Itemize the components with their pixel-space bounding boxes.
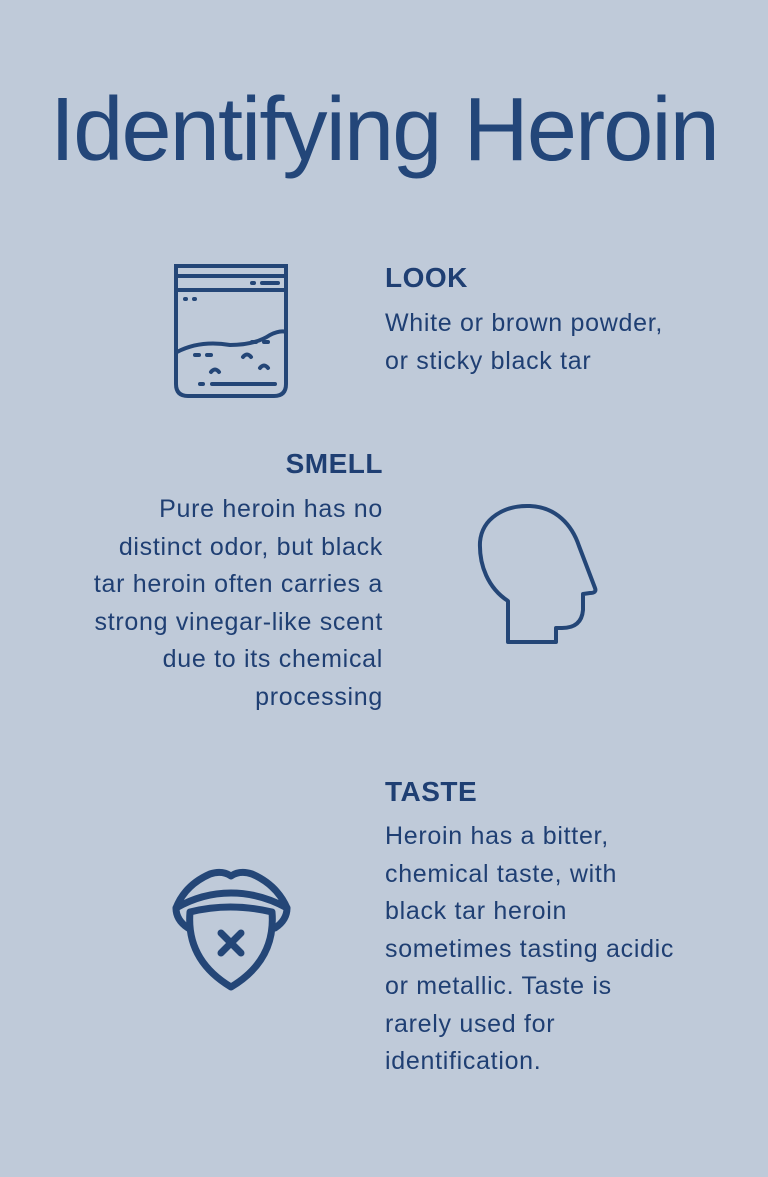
heading: look: LOOK	[385, 262, 468, 293]
text: look	[385, 309, 663, 374]
text: taste: or metallic. Taste is	[385, 972, 612, 1000]
text: taste: Heroin has a bitter,	[385, 822, 609, 850]
text: taste: rarely used for	[385, 1010, 555, 1038]
text: smell	[94, 495, 383, 710]
text: smell: processing	[255, 682, 383, 710]
text: look: White or brown powder,	[385, 309, 663, 337]
text: smell: Pure heroin has no	[159, 495, 383, 523]
text: taste: black tar heroin	[385, 897, 567, 925]
icon: head	[478, 504, 598, 644]
text: taste: identification.	[385, 1047, 541, 1075]
title: Identifying Heroin	[50, 80, 718, 180]
text: smell: strong vinegar-like scent	[95, 608, 383, 636]
text: taste: chemical taste, with	[385, 860, 617, 888]
icon: bag of powder	[174, 264, 288, 398]
text: smell: due to its chemical	[163, 645, 383, 673]
text: taste: sometimes tasting acidic	[385, 934, 674, 962]
heading: smell: SMELL	[286, 448, 383, 479]
text: taste	[385, 822, 674, 1075]
text: look: or sticky black tar	[385, 346, 591, 374]
icon: tongue with cross	[172, 868, 290, 990]
text: smell: tar heroin often carries a	[94, 570, 383, 598]
heading: taste: TASTE	[385, 776, 477, 807]
text: smell: distinct odor, but black	[119, 532, 383, 560]
